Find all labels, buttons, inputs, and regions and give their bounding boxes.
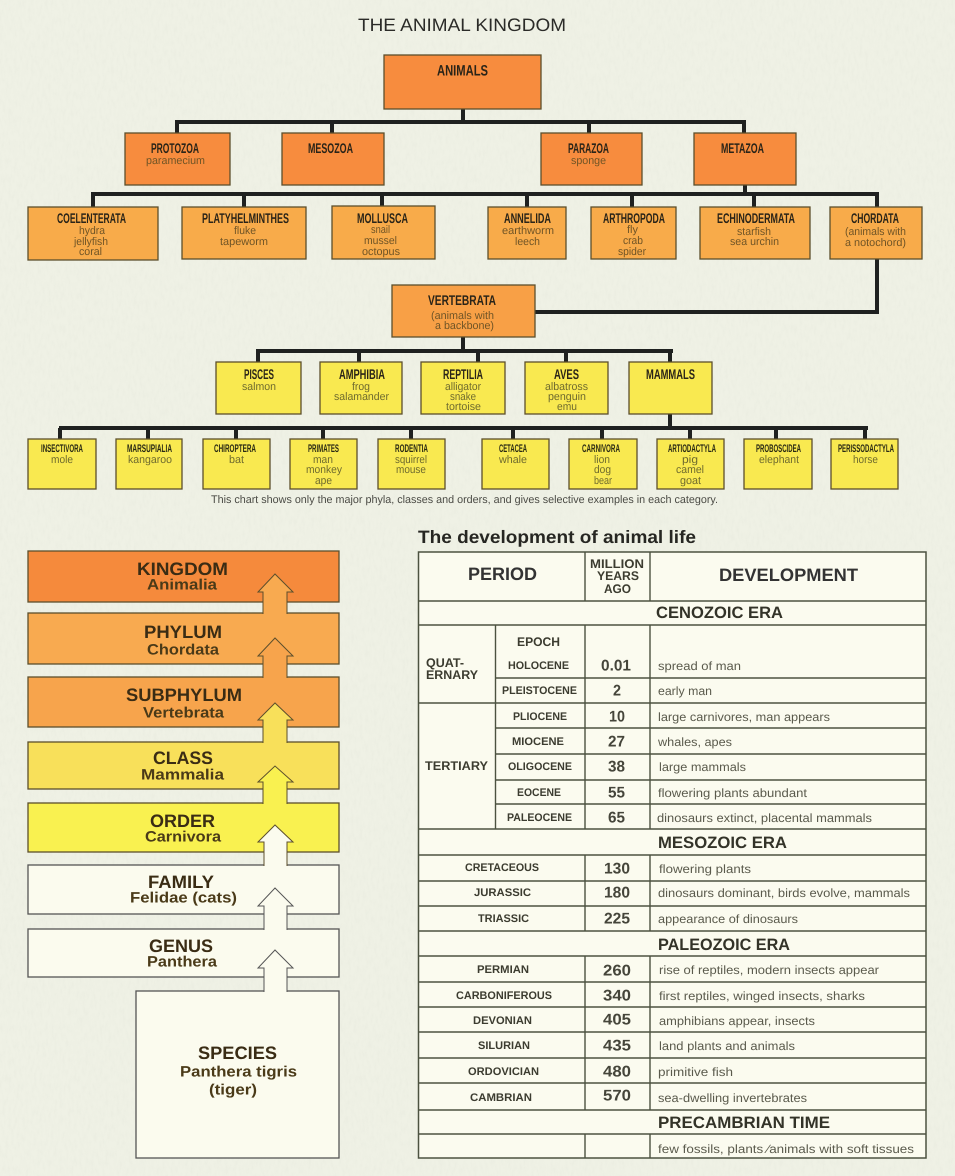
box: artiodactyla: ARTIODACTYLA	[668, 443, 716, 455]
box: reptilia	[421, 362, 505, 414]
box: reptilia: REPTILIA	[443, 366, 483, 382]
row: cretaceous	[465, 860, 751, 878]
box: pisces: PISCES	[244, 366, 274, 382]
box: platyhelminthes	[182, 207, 306, 259]
box: platyhelminthes: PLATYHELMINTHES	[202, 210, 289, 226]
box: annelida: earthworm	[502, 225, 554, 237]
row: silurian: 435	[603, 1038, 631, 1054]
box: carnivora: lion	[594, 454, 610, 466]
box: primates: ape	[315, 475, 332, 487]
table header: PERIOD	[468, 564, 537, 584]
row: miocene: MIOCENE	[512, 736, 564, 748]
box: cetacea: whale	[498, 454, 527, 466]
box: chiroptera	[203, 439, 270, 489]
row: miocene	[512, 734, 732, 750]
box: pisces: salmon	[242, 381, 276, 393]
rank: subphylum: Vertebrata	[143, 704, 225, 722]
row: holocene	[508, 658, 741, 674]
box: carnivora	[569, 439, 637, 489]
box: chiroptera: CHIROPTERA	[214, 443, 256, 455]
box: metazoa: METAZOA	[721, 140, 764, 156]
row: oligocene: 38	[608, 758, 625, 776]
box: annelida: ANNELIDA	[504, 210, 551, 226]
box: cetacea: CETACEA	[499, 443, 527, 455]
row: cretaceous: 130	[604, 860, 630, 878]
box: arthropoda: spider	[618, 246, 646, 258]
box: aves	[525, 362, 608, 414]
table header: YEARS	[597, 569, 639, 583]
rank: subphylum	[28, 677, 339, 727]
box: arthropoda: crab	[623, 235, 643, 247]
rank: kingdom: KINGDOM	[137, 559, 228, 579]
panel: taxonomy ladder	[28, 551, 339, 1158]
box: platyhelminthes: fluke	[234, 225, 256, 237]
box: carnivora: dog	[594, 464, 611, 476]
row: oligocene: OLIGOCENE	[508, 761, 572, 773]
row: cretaceous: CRETACEOUS	[465, 862, 539, 874]
table background	[418, 552, 926, 1158]
row: eocene: 55	[608, 784, 625, 802]
box: annelida: leech	[515, 236, 540, 248]
row: pliocene: PLIOCENE	[513, 711, 567, 723]
box: cetacea	[482, 439, 549, 489]
rank: kingdom: Animalia	[147, 576, 218, 594]
caption: This chart shows only the major phyla, classes and orders, and gives selective examples in each category.	[211, 494, 718, 506]
box: insectivora: INSECTIVORA	[41, 443, 83, 455]
rank: genus: Panthera	[147, 954, 218, 970]
row: pleistocene: 2	[613, 682, 621, 700]
row: carboniferous: CARBONIFEROUS	[456, 990, 552, 1002]
rank: family: FAMILY	[148, 872, 214, 892]
box: amphibia	[320, 362, 402, 414]
box: rodentia: squirrel	[395, 454, 427, 466]
box: mammals	[629, 362, 712, 414]
row: paleocene: 65	[608, 810, 625, 826]
box: chordata: (animals with	[845, 226, 906, 238]
row: triassic: TRIASSIC	[478, 913, 529, 925]
box: marsupialia	[116, 439, 182, 489]
row: eocene: EOCENE	[517, 787, 561, 799]
box: artiodactyla: camel	[676, 464, 704, 476]
rank: genus: GENUS	[149, 936, 213, 956]
period: tertiary: TERTIARY	[425, 759, 489, 773]
box: mesozoa: MESOZOA	[308, 140, 353, 156]
row: carboniferous: 340	[603, 988, 631, 1004]
row: jurassic	[474, 884, 910, 902]
row: holocene: HOLOCENE	[508, 660, 569, 672]
row: oligocene	[508, 758, 746, 776]
box: artiodactyla: pig	[682, 454, 698, 466]
box: coelenterata	[28, 207, 158, 260]
box: arthropoda	[591, 207, 676, 259]
box: marsupialia: MARSUPIALIA	[127, 443, 172, 455]
row: devonian	[473, 1012, 815, 1028]
box: vertebrata: a backbone)	[435, 320, 494, 332]
box: rodentia: RODENTIA	[395, 443, 428, 455]
table header: DEVELOPMENT	[719, 565, 858, 585]
rank: order	[28, 803, 339, 852]
row: pleistocene: PLEISTOCENE	[502, 685, 577, 697]
row: silurian: land plants and animals	[659, 1039, 795, 1053]
arrow: family to order	[258, 825, 293, 866]
row: holocene: 0.01	[601, 658, 631, 674]
arrow: species to genus	[258, 950, 293, 992]
box: platyhelminthes: tapeworm	[220, 236, 268, 248]
row: miocene: whales, apes	[657, 735, 732, 749]
row: ordovician: ORDOVICIAN	[468, 1066, 539, 1078]
table header: AGO	[604, 582, 631, 596]
rank: family	[28, 865, 339, 914]
box: perissodactyla: horse	[853, 454, 878, 466]
box: vertebrata	[392, 285, 535, 337]
box: protozoa	[125, 133, 230, 185]
rank: subphylum: SUBPHYLUM	[126, 685, 242, 705]
rank: class	[28, 742, 339, 789]
table header	[468, 557, 858, 596]
row: pliocene	[513, 708, 830, 726]
box: parazoa: sponge	[571, 155, 606, 167]
period: quaternary: ERNARY	[426, 668, 479, 682]
box: amphibia: salamander	[334, 391, 389, 403]
row: miocene: 27	[608, 734, 625, 750]
row: jurassic: JURASSIC	[474, 887, 531, 899]
row: jurassic: 180	[604, 884, 630, 902]
row: jurassic: dinosaurs dominant, birds evolve, mammals	[658, 886, 910, 900]
row: pliocene: 10	[609, 708, 625, 726]
arrow: subphylum to phylum	[258, 638, 293, 678]
box: mollusca: snail	[371, 224, 390, 236]
row: pleistocene	[502, 682, 712, 700]
box: marsupialia: kangaroo	[128, 454, 172, 466]
box: arthropoda: fly	[627, 224, 638, 236]
era: paleozoic: PALEOZOIC ERA	[658, 936, 790, 954]
row: carboniferous: first reptiles, winged insects, sharks	[659, 989, 865, 1003]
row: silurian: SILURIAN	[478, 1040, 530, 1052]
box: vertebrata: VERTEBRATA	[428, 292, 496, 308]
box: pisces	[216, 362, 301, 414]
rank: class: Mammalia	[141, 766, 225, 784]
box: proboscidea: elephant	[759, 454, 799, 466]
box: echinodermata: starfish	[737, 226, 771, 238]
box: insectivora: mole	[51, 454, 73, 466]
box: perissodactyla	[831, 439, 898, 489]
row: paleocene: dinosaurs extinct, placental mammals	[657, 811, 872, 825]
arrow: phylum to kingdom	[258, 574, 293, 614]
box: mollusca	[332, 206, 435, 259]
box: chordata	[830, 207, 922, 259]
box: proboscidea: PROBOSCIDEA	[756, 443, 801, 455]
box: amphibia: frog	[352, 381, 370, 393]
arrow: order to class	[258, 766, 293, 804]
period: quaternary	[426, 656, 479, 682]
box: artiodactyla: goat	[680, 475, 701, 487]
box: chordata: a notochord)	[845, 237, 906, 249]
box: mammals: MAMMALS	[646, 366, 695, 382]
box: annelida	[488, 207, 566, 259]
period: quaternary: QUAT-	[426, 656, 464, 670]
rank: species: (tiger)	[209, 1082, 257, 1098]
box: coelenterata: coral	[79, 246, 102, 258]
box: coelenterata: jellyfish	[73, 236, 108, 248]
box: mesozoa	[282, 133, 384, 185]
rank: species: Panthera tigris	[180, 1064, 297, 1080]
rank: species	[136, 991, 339, 1158]
box: metazoa	[694, 133, 796, 185]
row: oligocene: large mammals	[659, 760, 746, 774]
box: aves: AVES	[554, 366, 579, 382]
row: devonian: amphibians appear, insects	[659, 1014, 815, 1028]
box: rodentia	[378, 439, 445, 489]
row: pliocene: large carnivores, man appears	[658, 710, 830, 724]
rank: order: Carnivora	[145, 828, 222, 846]
box: proboscidea	[744, 439, 812, 489]
box: chordata: CHORDATA	[851, 210, 899, 226]
label: epoch: EPOCH	[517, 635, 560, 649]
row: ordovician: primitive fish	[658, 1065, 733, 1079]
box: echinodermata	[700, 207, 810, 259]
era: mesozoic: MESOZOIC ERA	[658, 834, 787, 852]
box: aves: albatross	[545, 381, 588, 393]
box: reptilia: tortoise	[446, 401, 481, 413]
row: precambrian: few fossils, plants ⁄animals with soft tissues	[658, 1142, 914, 1156]
table header: MILLION	[590, 557, 644, 571]
box: mollusca: MOLLUSCA	[357, 210, 408, 226]
row: cambrian: 570	[603, 1088, 631, 1104]
row: permian: rise of reptiles, modern insects appear	[659, 963, 879, 977]
era: precambrian: PRECAMBRIAN TIME	[658, 1114, 830, 1132]
box: mollusca: mussel	[364, 235, 397, 247]
row: permian	[477, 962, 879, 980]
box: echinodermata: sea urchin	[730, 236, 779, 248]
row: eocene: flowering plants abundant	[658, 786, 808, 800]
panel: geological table	[418, 552, 926, 1158]
row: silurian	[478, 1038, 795, 1054]
heading: development of animal life: The development of animal life	[418, 527, 696, 547]
box: aves: emu	[557, 401, 577, 413]
box: primates: PRIMATES	[308, 443, 339, 455]
box: arthropoda: ARTHROPODA	[603, 210, 665, 226]
row: permian: PERMIAN	[477, 964, 529, 976]
box: echinodermata: ECHINODERMATA	[717, 210, 795, 226]
row: eocene	[517, 784, 808, 802]
row: paleocene	[507, 810, 872, 826]
box: vertebrata: (animals with	[431, 310, 494, 322]
box: animals	[384, 55, 541, 109]
box: carnivora: bear	[594, 475, 612, 487]
row: cambrian	[470, 1088, 807, 1105]
box: aves: penguin	[548, 391, 586, 403]
box: primates: man	[313, 454, 333, 466]
row: paleocene: PALEOCENE	[507, 812, 572, 824]
box: coelenterata: hydra	[79, 225, 106, 237]
box: carnivora: CARNIVORA	[582, 443, 620, 455]
table grid	[418, 552, 926, 1158]
box: primates: monkey	[306, 464, 342, 476]
row: triassic: appearance of dinosaurs	[658, 912, 798, 926]
box: chiroptera: bat	[229, 454, 244, 466]
box: perissodactyla: PERISSODACTYLA	[838, 443, 894, 455]
row: carboniferous	[456, 988, 865, 1004]
box: primates	[290, 439, 357, 489]
row: triassic	[478, 910, 798, 928]
arrow: genus to family	[258, 888, 293, 930]
rank: class: CLASS	[153, 748, 213, 768]
row: cambrian: sea-dwelling invertebrates	[658, 1091, 807, 1105]
box: coelenterata: COELENTERATA	[57, 210, 126, 226]
row: cambrian: CAMBRIAN	[470, 1092, 532, 1104]
box: parazoa: PARAZOA	[568, 140, 609, 156]
box: mollusca: octopus	[362, 246, 400, 258]
box: protozoa: PROTOZOA	[151, 140, 199, 156]
box: amphibia: AMPHIBIA	[339, 366, 385, 382]
row: pleistocene: early man	[658, 684, 712, 698]
rank: family: Felidae (cats)	[130, 890, 237, 906]
row: ordovician: 480	[603, 1064, 631, 1080]
row: cretaceous: flowering plants	[659, 862, 751, 876]
rank: phylum	[28, 613, 339, 664]
box: protozoa: paramecium	[146, 155, 205, 167]
rank: kingdom	[28, 551, 339, 602]
row: devonian: DEVONIAN	[473, 1015, 532, 1027]
box: rodentia: mouse	[396, 464, 426, 476]
row: devonian: 405	[603, 1012, 631, 1028]
rank: genus	[28, 929, 339, 977]
rank: order: ORDER	[150, 811, 215, 831]
box: insectivora	[28, 439, 96, 489]
row: ordovician	[468, 1064, 733, 1080]
box: parazoa	[541, 133, 642, 185]
rank: phylum: PHYLUM	[144, 622, 222, 642]
title: THE ANIMAL KINGDOM	[358, 15, 566, 35]
box: reptilia: snake	[450, 391, 476, 403]
era: cenozoic: CENOZOIC ERA	[656, 604, 783, 622]
box: reptilia: alligator	[445, 381, 481, 393]
box: animals: ANIMALS	[437, 62, 488, 80]
row: holocene: spread of man	[658, 659, 741, 673]
rank: phylum: Chordata	[147, 642, 220, 658]
box: artiodactyla	[657, 439, 724, 489]
row: triassic: 225	[604, 910, 630, 928]
row: permian: 260	[603, 962, 631, 980]
tree connector lines	[59, 109, 879, 439]
arrow: class to subphylum	[258, 703, 293, 743]
rank: species: SPECIES	[198, 1043, 277, 1063]
